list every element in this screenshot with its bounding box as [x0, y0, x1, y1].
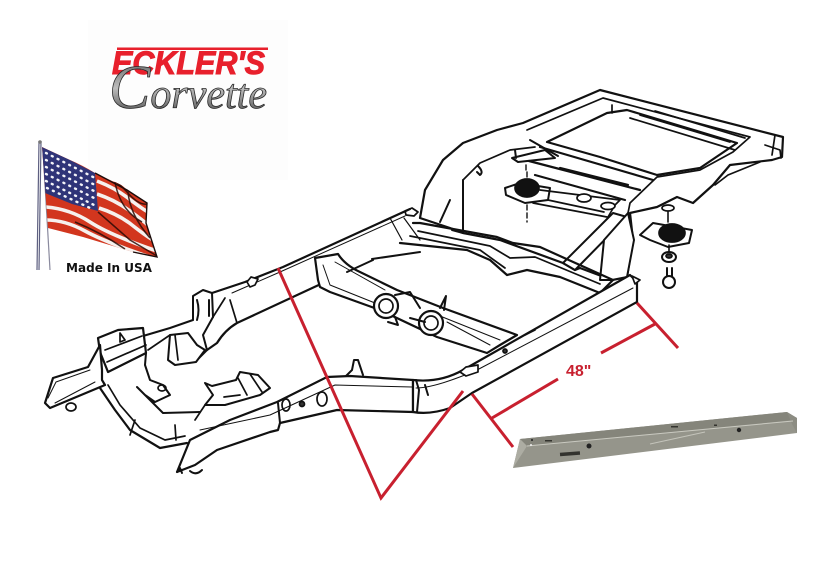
center cross member: [315, 252, 517, 353]
far front frame rail: [143, 209, 410, 358]
logo: Eckler's Corvette: Corvette: [109, 54, 267, 122]
front crossmember and nose: [45, 328, 205, 448]
logo: Eckler's Corvette: ECKLER'S: [112, 45, 266, 81]
infographic canvas: [36, 48, 797, 501]
near frame rail: [177, 360, 413, 473]
rear crossbar: [413, 275, 640, 413]
dimension label: 48 inches: 48": [566, 363, 591, 380]
frame line drawing: [45, 90, 783, 473]
rear kick-up section: [420, 90, 783, 280]
body mounts and hardware: [505, 140, 692, 288]
logo: Eckler's Corvette: [88, 20, 288, 180]
label: Made In USA: Made In USA: [66, 261, 153, 275]
icon: American flag: [37, 140, 163, 270]
red dimension lines: [278, 268, 678, 498]
photo: steel crossbar: [513, 412, 797, 468]
far rail cross section: [390, 208, 613, 293]
